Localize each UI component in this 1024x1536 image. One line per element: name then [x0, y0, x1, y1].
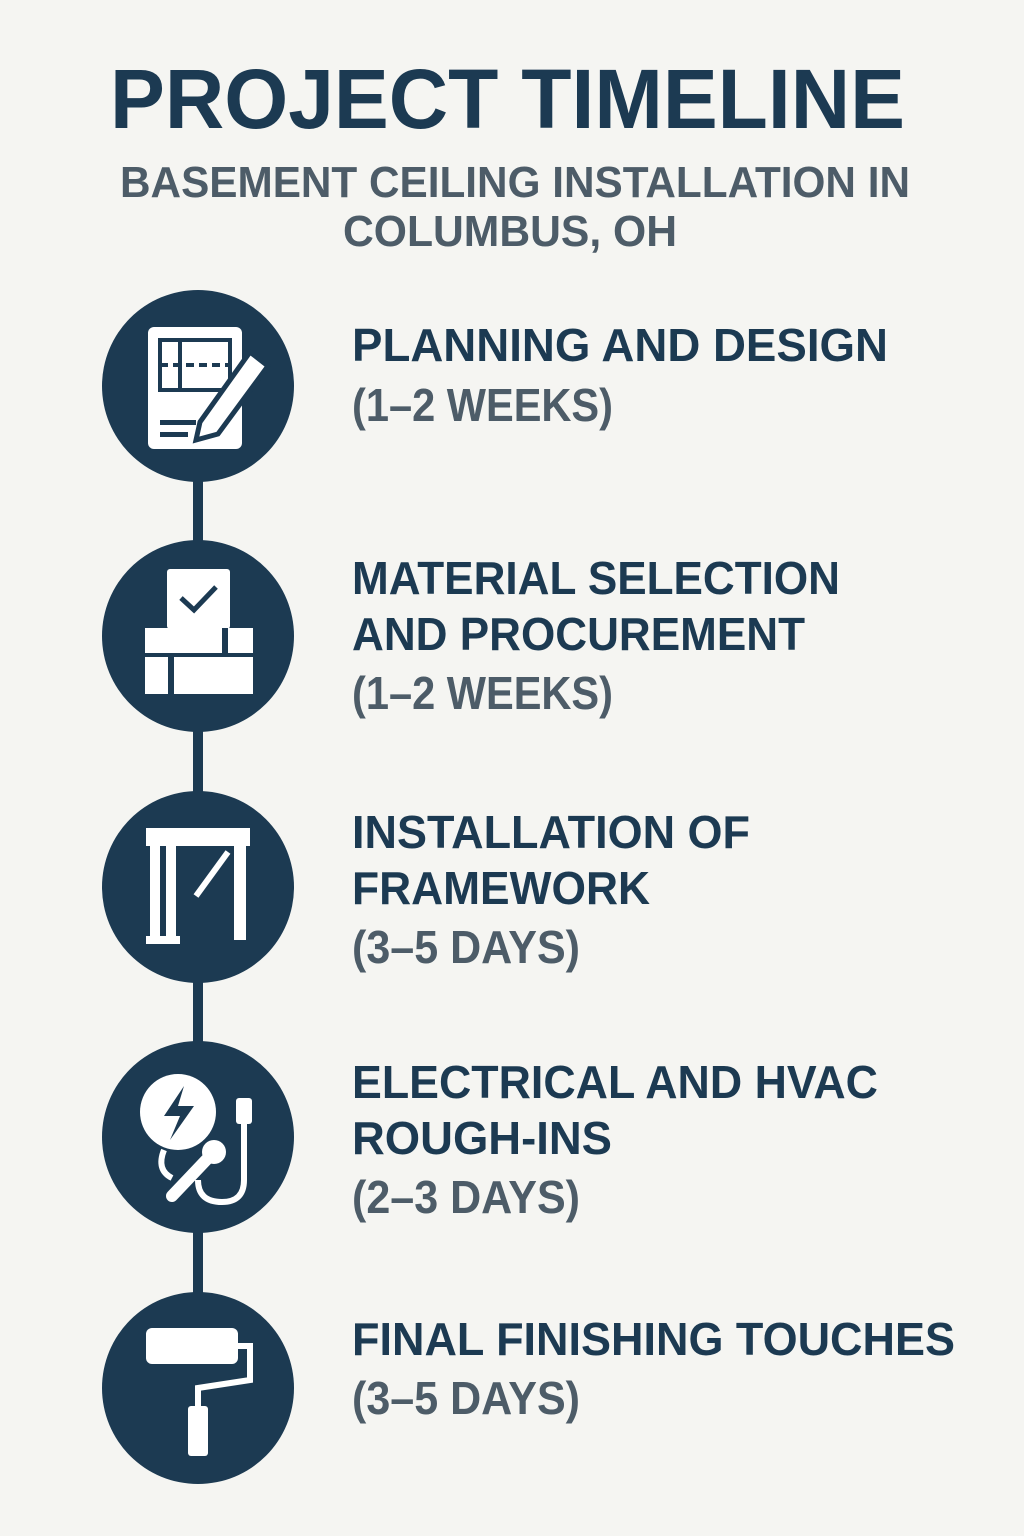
- step 2 text: [352, 552, 840, 719]
- step 3 text: [352, 806, 750, 973]
- step 2 text: MATERIAL SELECTION: [352, 552, 840, 604]
- step 4 text: [352, 1056, 878, 1223]
- step 4 text: ROUGH-INS: [352, 1112, 612, 1164]
- step 1 text: (1–2 WEEKS): [352, 379, 613, 431]
- step 2 icon: checkbox and boxes: [102, 540, 294, 732]
- step 5 text: (3–5 DAYS): [352, 1372, 580, 1424]
- step 4 icon: electrical and HVAC: [102, 1041, 294, 1233]
- step 5 icon: paint roller: [102, 1292, 294, 1484]
- step 5 text: FINAL FINISHING TOUCHES: [352, 1313, 955, 1365]
- step 3 text: (3–5 DAYS): [352, 921, 580, 973]
- step 4 text: ELECTRICAL AND HVAC: [352, 1056, 878, 1108]
- timeline connector: [193, 386, 203, 1386]
- step 1 text: PLANNING AND DESIGN: [352, 319, 888, 371]
- step 1 icon: plan and pencil: [102, 290, 294, 482]
- step 3 text: FRAMEWORK: [352, 862, 650, 914]
- title: PROJECT TIMELINE: [110, 52, 905, 146]
- step 2 text: (1–2 WEEKS): [352, 667, 613, 719]
- subtitle: COLUMBUS, OH: [343, 207, 677, 256]
- step 4 text: (2–3 DAYS): [352, 1171, 580, 1223]
- step 3 text: INSTALLATION OF: [352, 806, 750, 858]
- step 2 text: AND PROCUREMENT: [352, 608, 805, 660]
- subtitle: BASEMENT CEILING INSTALLATION IN: [120, 158, 910, 207]
- step 5 text: [352, 1313, 955, 1424]
- step 1 text: [352, 319, 888, 431]
- subtitle: [120, 158, 910, 256]
- step 3 icon: framework: [102, 791, 294, 983]
